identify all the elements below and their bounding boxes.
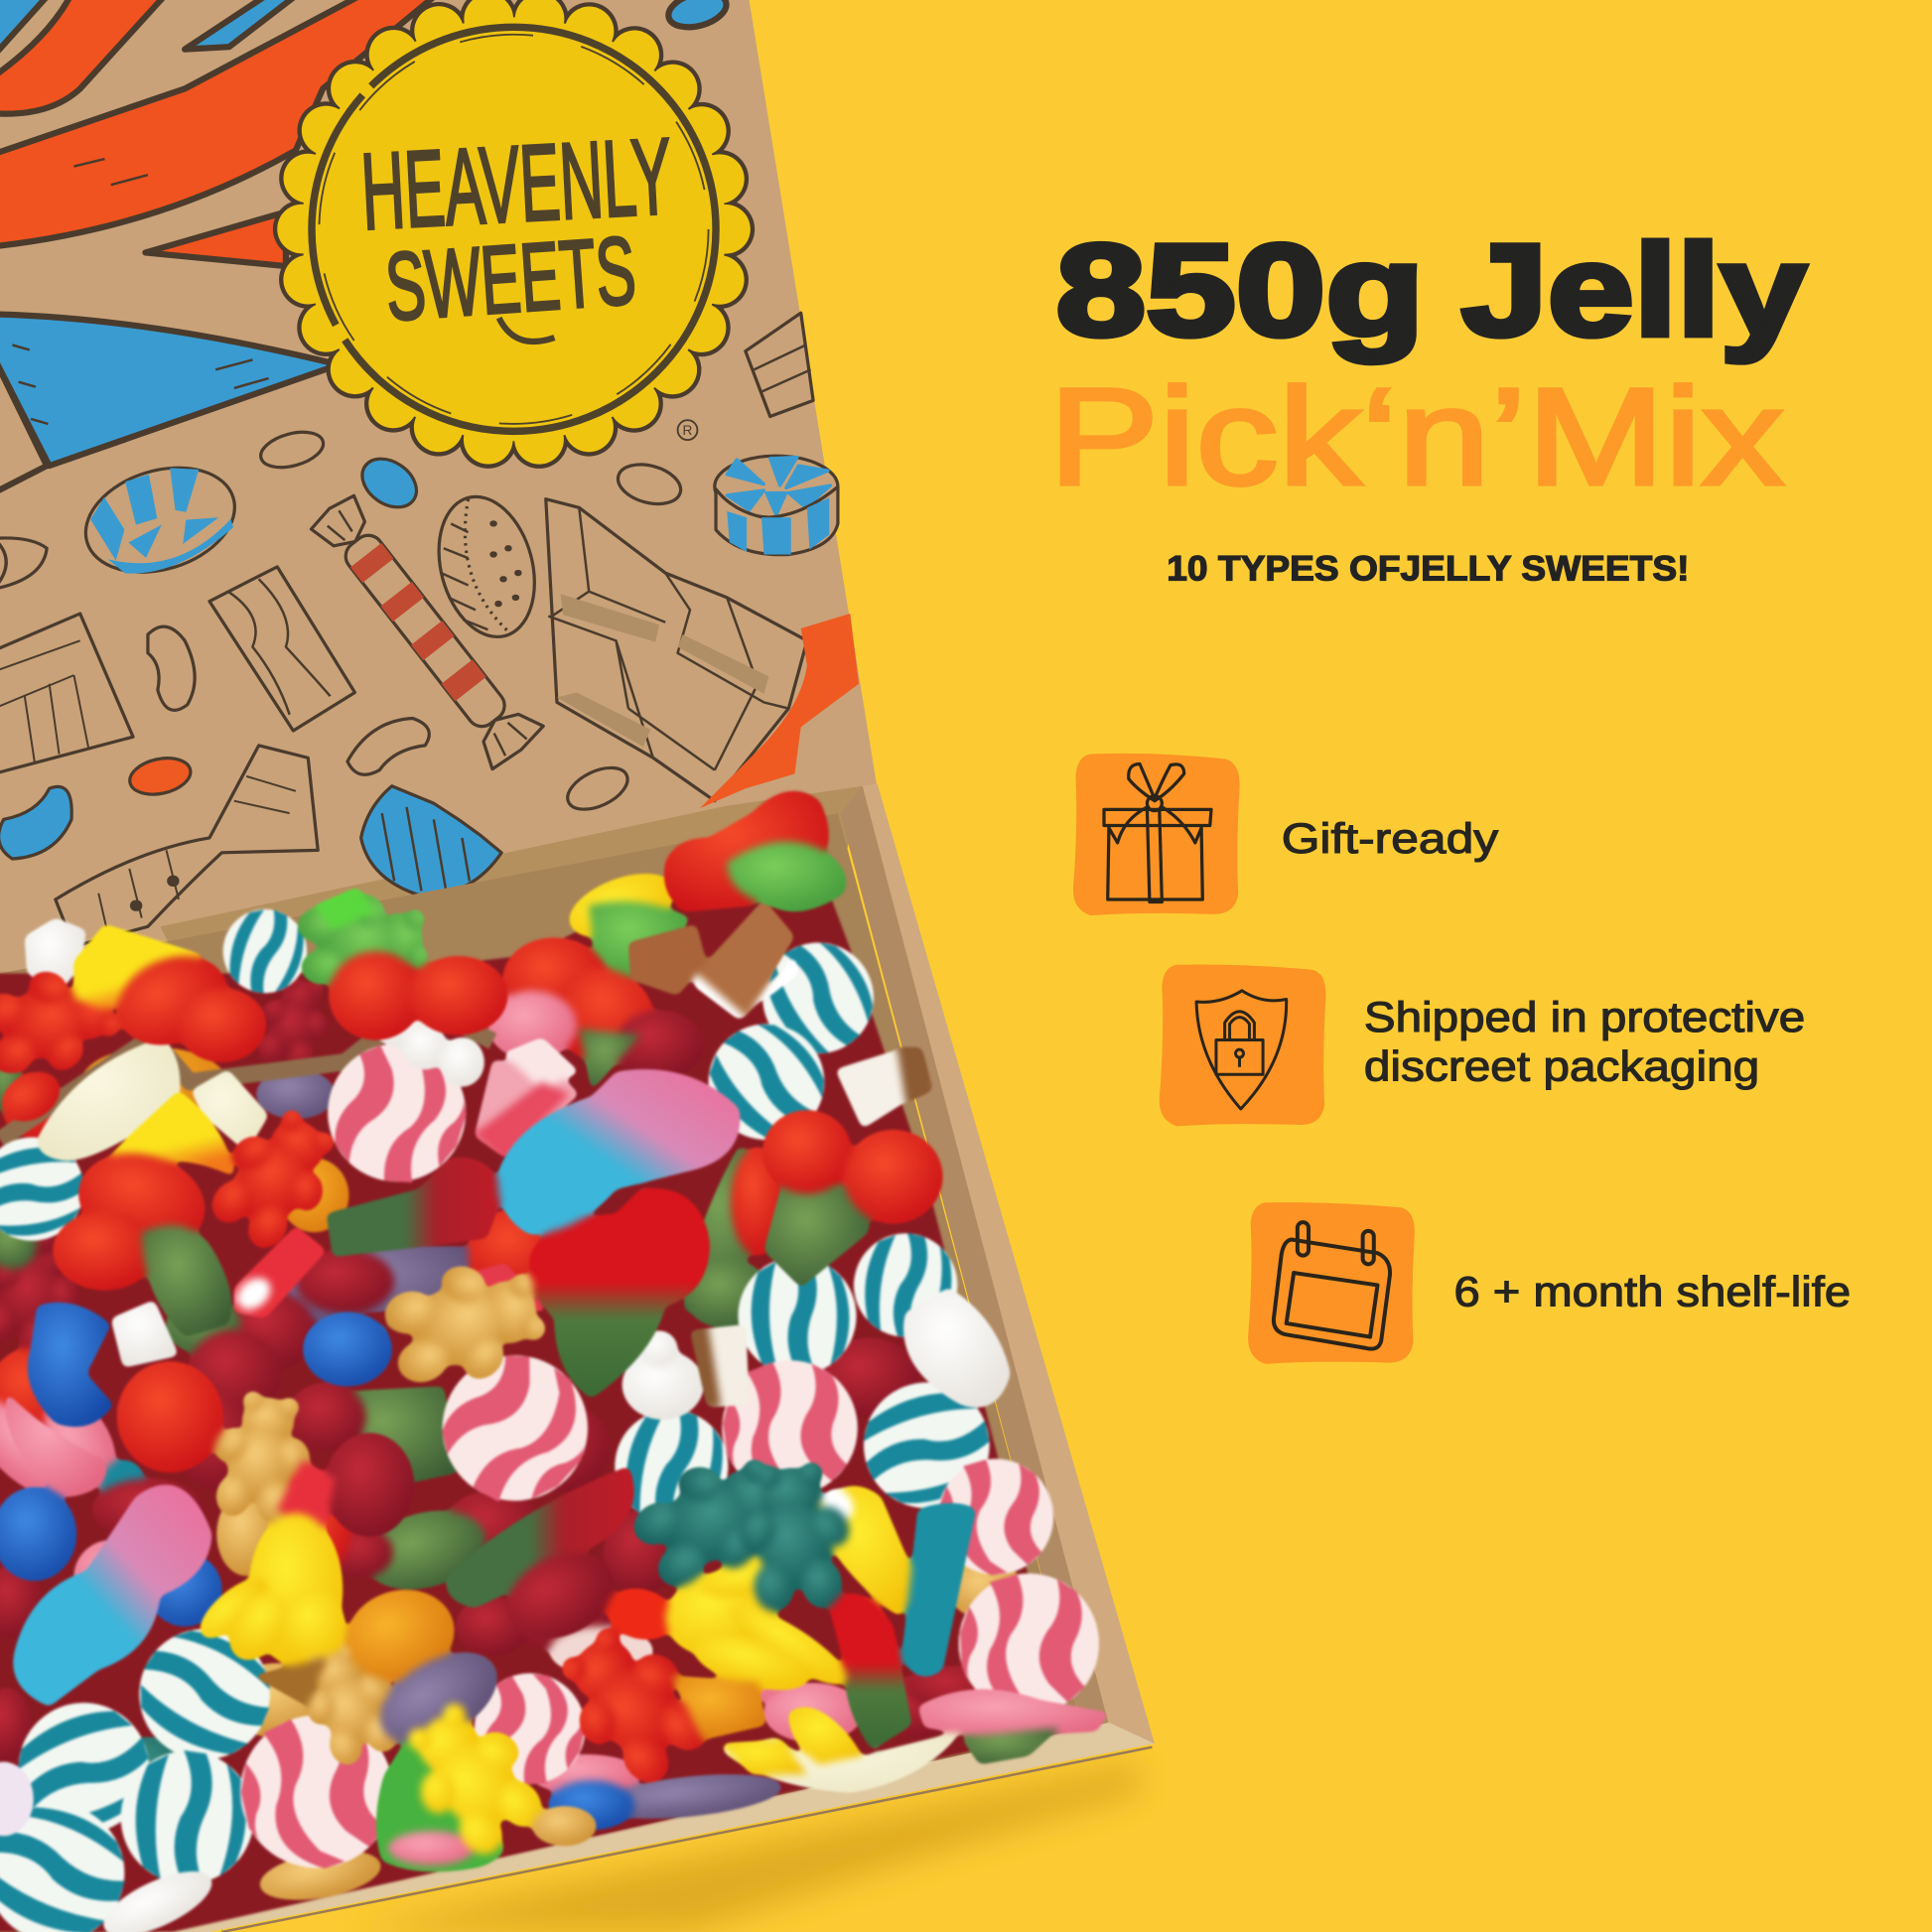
- label: Shipped in protective: [1364, 994, 1805, 1040]
- yellow chicken foot gummy: [191, 1513, 345, 1671]
- product photo: open gift box of jelly sweets: [0, 0, 1155, 1932]
- panel: tray front edge: [154, 1723, 1155, 1932]
- sweets: brown skin strips behind marshmallows: [0, 1004, 492, 1140]
- feature: protective packaging: [1160, 965, 1805, 1126]
- chocolate bar left: [0, 614, 133, 773]
- blue round candy right: [715, 456, 838, 555]
- striped stick candy: [304, 487, 546, 771]
- panel: kraft box lid: [0, 0, 878, 998]
- wrapper piece right: [746, 313, 813, 416]
- dotted oval sweet: [424, 485, 549, 647]
- seal: Heavenly Sweets logo: R: [683, 423, 693, 438]
- sweets: teal and white striped: [0, 897, 1004, 1932]
- label: 6 + month shelf-life: [1453, 1269, 1851, 1315]
- illustration: sweets doodles: [0, 313, 859, 946]
- blue cupcake case: [361, 786, 501, 897]
- title: 850g Jelly: Jelly: [1461, 217, 1806, 363]
- panel: tray floor: [0, 813, 1084, 1932]
- caramel bar: [209, 567, 354, 731]
- title: 850g Jelly: 850g: [1056, 217, 1425, 363]
- orange wrapper end: [700, 614, 859, 808]
- illustration: ribbons and blue banners: [0, 0, 730, 492]
- sweets: red and white tubes: [231, 1037, 579, 1318]
- blue bean: [0, 786, 71, 859]
- seal: Heavenly Sweets logo: HEAVENLY: [358, 116, 675, 253]
- sweets: white marshmallow pieces: [0, 918, 1011, 1932]
- sweets: red and white striped: [223, 1029, 1105, 1885]
- wrapped sweet bottom: [56, 746, 318, 946]
- label: discreet packaging: [1364, 1042, 1759, 1089]
- box shadow: [345, 1762, 1140, 1932]
- icon: padlock shield: [1160, 965, 1325, 1126]
- blue round candy left: [72, 451, 247, 590]
- seal: Heavenly Sweets logo: SWEETS: [382, 215, 639, 342]
- icon: gift box: [1073, 754, 1240, 915]
- yellow corn gummy: [601, 1550, 856, 1700]
- bean: [148, 626, 195, 710]
- panel: tray back wall: [160, 786, 863, 998]
- nougat blocks: [546, 499, 807, 801]
- title: Pick'n'Mix: Pick‘n’Mix: [1048, 360, 1784, 514]
- sweets: brown and white blocks: [628, 899, 932, 1407]
- panel: tray right wall: [863, 783, 1155, 1743]
- sweets: gummies front layer: [0, 791, 1109, 1873]
- label: Gift-ready: [1282, 815, 1499, 862]
- seal: Heavenly Sweets logo: [302, 17, 726, 441]
- label: [1364, 994, 1805, 1089]
- subtitle: 10 TYPES OFJELLY SWEETS!: [1167, 551, 1690, 589]
- feature: gift-ready: [1073, 754, 1499, 915]
- title: 850g Jelly: [1056, 217, 1806, 363]
- left cashew: [0, 538, 47, 589]
- icon: calendar: [1248, 1202, 1415, 1364]
- panel: sweets pile: [0, 791, 1109, 1932]
- sweets: back layer fill: [0, 861, 1023, 1908]
- cashew bottom: [347, 719, 429, 774]
- feature: shelf life: [1248, 1202, 1851, 1364]
